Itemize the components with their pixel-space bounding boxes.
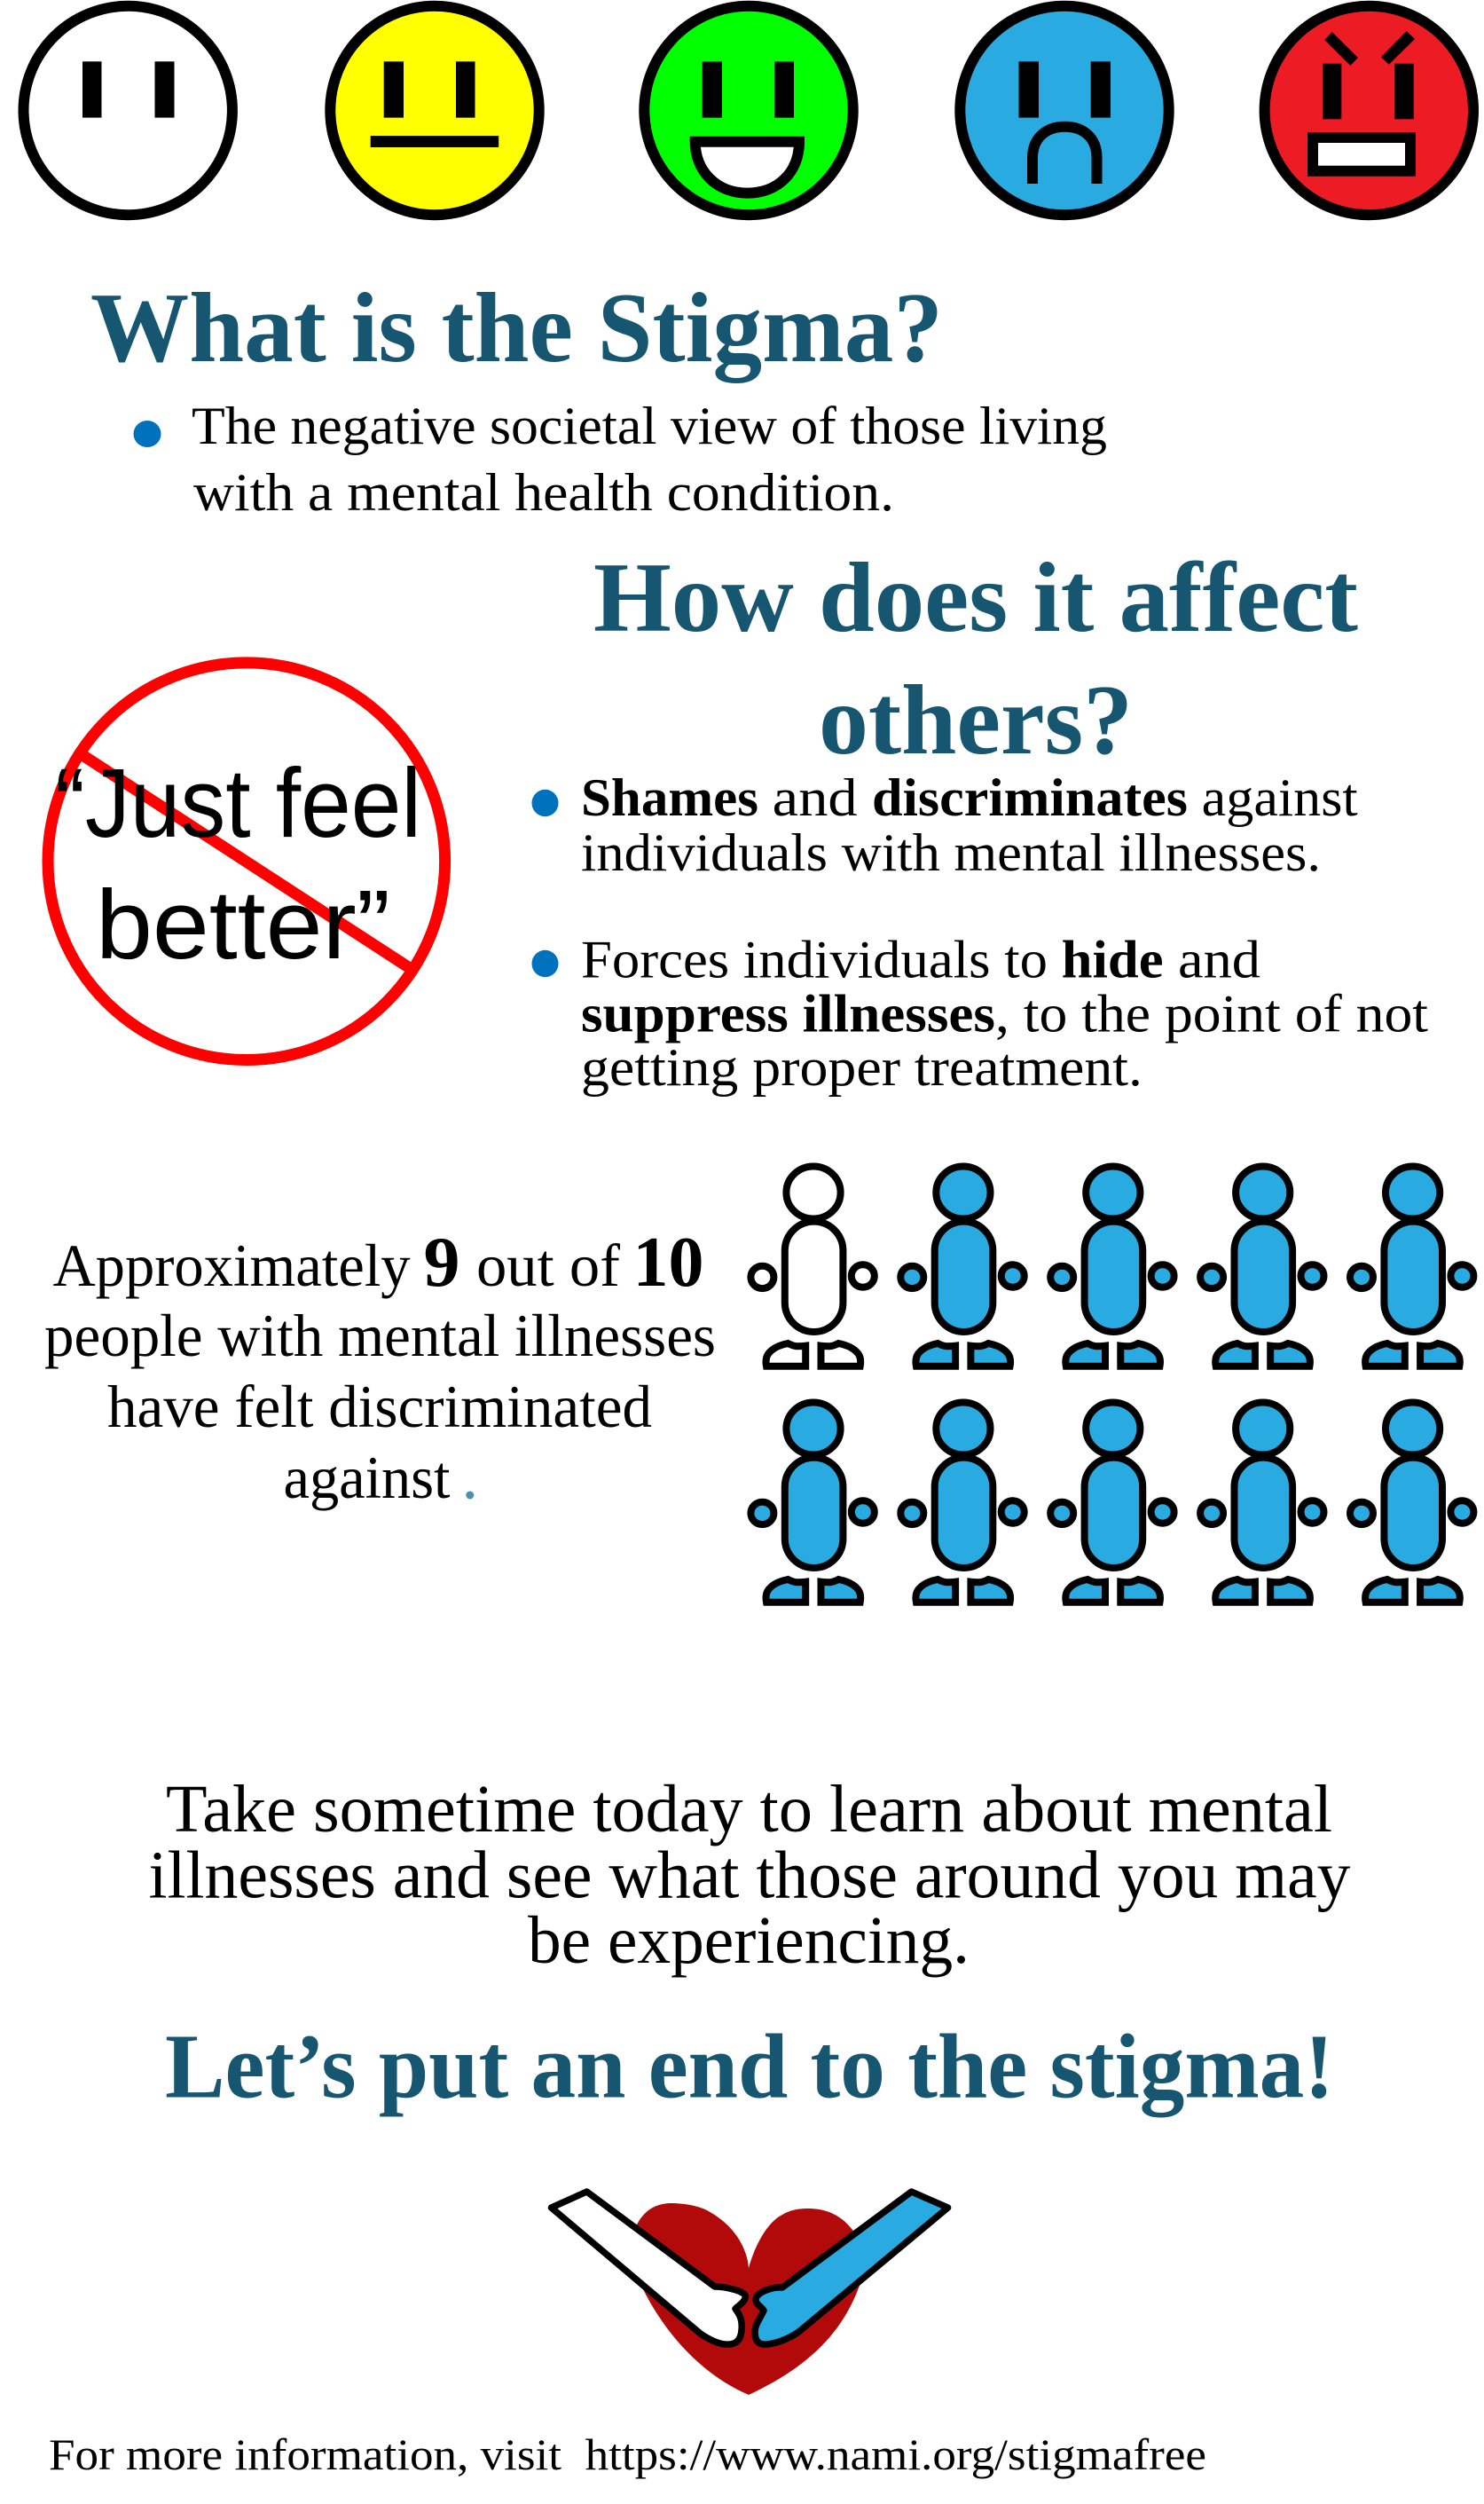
text block: shames and discriminates: and: [773, 768, 858, 827]
text block: 9 out of 10 statistic: Approximately: [53, 1232, 411, 1299]
icon: heart with joined arms: [552, 2192, 948, 2395]
text block: 9 out of 10 statistic: out of: [476, 1232, 620, 1299]
person 5: [1350, 1166, 1473, 1366]
text block: 9 out of 10 statistic: [44, 1224, 716, 1511]
footer: source link: For more information, visit https://www.nami.org/stigmafree: [49, 2429, 1206, 2479]
text block: shames and discriminates: individuals with mental illnesses.: [581, 823, 1321, 882]
text block: call to learn: be experiencing.: [528, 1903, 970, 1978]
person 2: [900, 1166, 1025, 1366]
icon: sad blue face: [960, 6, 1169, 215]
text block: hide and suppress illnesses: [532, 930, 1428, 1097]
heading: How does it affect others?: How does it affect: [593, 543, 1358, 653]
icon: prohibition sign over phrase: [48, 663, 445, 1059]
icon: neutral white face: [23, 6, 232, 215]
icon: smiling green face: [644, 6, 853, 215]
icon: flat-mouth yellow face: [330, 6, 539, 215]
person 8: [1050, 1402, 1174, 1602]
text block: hide and suppress illnesses: suppress illnesses: [581, 984, 995, 1043]
quote: Just feel better: better”: [96, 870, 390, 980]
text block: hide and suppress illnesses: hide: [1062, 930, 1164, 988]
person 9: [1200, 1402, 1323, 1602]
quote: Just feel better: [55, 749, 421, 980]
text block: stigma definition: The negative societal view of those living: [192, 397, 1107, 455]
text block: 9 out of 10 statistic: 10: [633, 1224, 704, 1302]
text block: call to learn: Take sometime today to learn about mental: [166, 1772, 1332, 1847]
person 10: [1350, 1402, 1473, 1602]
text block: call to learn: illnesses and see what those around you may: [149, 1839, 1350, 1913]
heading: How does it affect others?: [593, 543, 1358, 776]
text block: shames and discriminates: against: [1202, 768, 1358, 827]
heading: What is the Stigma?: What is the Stigma?: [90, 273, 943, 383]
text block: hide and suppress illnesses: and: [1178, 930, 1260, 988]
text block: stigma definition: [133, 397, 1107, 522]
blue arm: [755, 2192, 948, 2344]
text block: hide and suppress illnesses: getting proper treatment.: [581, 1038, 1142, 1097]
text block: shames and discriminates: [532, 768, 1358, 882]
person 3: [1050, 1166, 1174, 1366]
text block: stigma definition: with a mental health condition.: [193, 463, 894, 522]
pictogram: 9 of 10 people highlighted: [750, 1166, 1473, 1602]
person 1 (white): [750, 1166, 875, 1366]
quote: Just feel better: “Just feel: [55, 749, 421, 858]
heading: Let's put an end to the stigma!: Let’s put an end to the stigma!: [165, 2016, 1334, 2117]
text block: 9 out of 10 statistic: against: [284, 1444, 451, 1511]
text block: hide and suppress illnesses: , to the point of not: [995, 984, 1428, 1043]
person 7: [900, 1402, 1025, 1602]
text block: shames and discriminates: Shames: [581, 768, 758, 827]
icon: angry red face: [1265, 6, 1473, 215]
heading: How does it affect others?: others?: [819, 665, 1133, 776]
text block: hide and suppress illnesses: Forces individuals to: [581, 930, 1048, 988]
text block: 9 out of 10 statistic: have felt discriminated: [107, 1373, 652, 1440]
text block: 9 out of 10 statistic: people with mental illnesses: [44, 1302, 716, 1369]
white arm: [552, 2192, 745, 2344]
person 4: [1200, 1166, 1323, 1366]
heart: [633, 2203, 863, 2395]
text block: shames and discriminates: discriminates: [872, 768, 1188, 827]
text block: 9 out of 10 statistic: 9: [424, 1224, 459, 1302]
person 6: [750, 1402, 875, 1602]
text block: call to learn: [149, 1772, 1350, 1978]
